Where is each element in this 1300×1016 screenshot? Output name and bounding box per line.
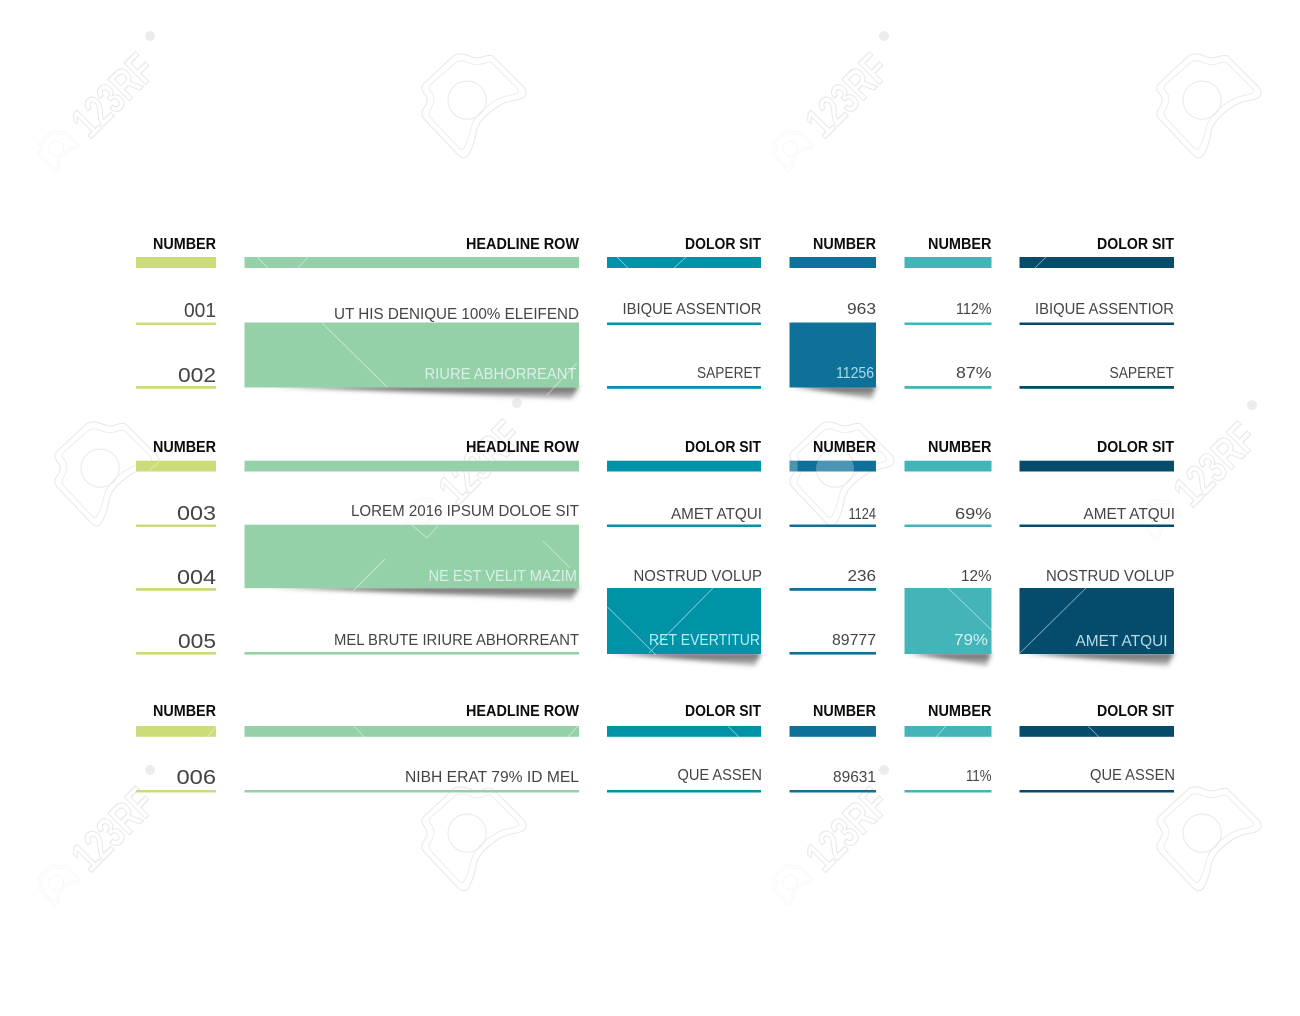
watermark: 123RF stamp middle left: 123RF — [429, 412, 532, 514]
highlight: teal note: RET EVERTITUR — [649, 632, 760, 649]
row 006: QUE ASSEN — [1090, 767, 1175, 784]
row 004: 004 — [177, 567, 216, 589]
watermark: 123RF stamp middle right — [1141, 400, 1267, 540]
header row 3: HEADLINE ROW — [466, 703, 579, 720]
row 006: NIBH ERAT 79% ID MEL — [405, 769, 579, 786]
header row 1: NUMBER — [813, 236, 876, 253]
row 004: NOSTRUD VOLUP — [634, 568, 762, 585]
header row 2: NUMBER — [928, 439, 992, 456]
watermark: 123RF stamp bottom left — [39, 765, 165, 905]
header row 3: NUMBER — [153, 703, 216, 720]
header row 2: NUMBER — [813, 439, 876, 456]
watermark: 123RF stamp middle right: 123RF — [1164, 414, 1267, 516]
header row 3: NUMBER — [928, 703, 992, 720]
row 006: 006 — [176, 767, 216, 789]
header row 2: HEADLINE ROW — [466, 439, 579, 456]
watermark: 123RF stamp middle left — [406, 398, 532, 538]
watermark: 123RF stamp top centre — [773, 31, 899, 171]
watermark: 123RF stamp top centre: 123RF — [796, 45, 899, 147]
header row 2: DOLOR SIT — [685, 439, 761, 456]
row 001 — [136, 300, 1174, 325]
watermark hairlines across coloured blocks — [149, 257, 1099, 737]
header row 1: DOLOR SIT — [685, 236, 761, 253]
table section 1 — [136, 236, 1174, 399]
row 001: IBIQUE ASSENTIOR — [1035, 301, 1174, 318]
row 002: 002 — [178, 365, 216, 387]
header row 3: NUMBER — [813, 703, 876, 720]
header row 2: NUMBER — [153, 439, 216, 456]
row 006: 11% — [966, 768, 992, 785]
row 002: SAPERET — [1110, 365, 1174, 382]
row 001: UT HIS DENIQUE 100% ELEIFEND — [334, 306, 579, 323]
table section 2 — [136, 439, 1175, 666]
highlight: teal note — [607, 588, 761, 666]
watermark highlight on number bar — [790, 460, 854, 472]
header row 1: NUMBER — [928, 236, 992, 253]
highlight: aqua note: 79% — [954, 632, 988, 649]
row 003: AMET ATQUI — [671, 506, 762, 523]
highlight: blue note: 11256 — [836, 365, 874, 382]
highlight: aqua note — [904, 588, 992, 666]
highlight: green note — [244, 525, 579, 600]
header row 3 — [136, 703, 1174, 737]
header row 1 — [136, 236, 1174, 268]
header row 1: DOLOR SIT — [1097, 236, 1174, 253]
header row 2: DOLOR SIT — [1097, 439, 1174, 456]
watermark: 123RF stamp top left: 123RF — [62, 45, 165, 147]
header row 1: NUMBER — [153, 236, 216, 253]
row 005: 005 — [178, 631, 216, 653]
row 003: 003 — [177, 503, 216, 525]
row 002 — [136, 322, 1174, 399]
row 002: SAPERET — [697, 365, 761, 382]
row 001: 001 — [184, 300, 216, 322]
watermark: 123RF stamp bottom centre — [773, 765, 899, 905]
row 005 — [136, 588, 1174, 666]
row 004: 12% — [961, 568, 992, 585]
watermark: egg logos — [55, 54, 1261, 891]
header row 3: DOLOR SIT — [1097, 703, 1174, 720]
table section 3 — [136, 703, 1175, 792]
watermark: 123RF stamp bottom left: 123RF — [62, 779, 165, 881]
highlight: blue note — [790, 322, 876, 399]
highlight: green note: NE EST VELIT MAZIM — [428, 568, 577, 585]
highlight: navy note: AMET ATQUI — [1076, 633, 1168, 650]
watermark: 123RF stamp top left — [39, 31, 165, 171]
highlight: green note — [244, 322, 579, 399]
row 004 — [136, 525, 1174, 600]
row 003: AMET ATQUI — [1084, 506, 1175, 523]
row 003: 69% — [955, 506, 992, 523]
row 004: NOSTRUD VOLUP — [1046, 568, 1174, 585]
row 001: 963 — [847, 301, 876, 318]
header row 2 — [136, 439, 1174, 472]
row 003 — [136, 503, 1175, 527]
watermark: 123RF stamp bottom centre: 123RF — [796, 779, 899, 881]
row 003: 1124 — [848, 506, 876, 523]
row 001: IBIQUE ASSENTIOR — [622, 301, 762, 318]
row 001: 112% — [956, 301, 992, 318]
highlight: navy note — [1020, 588, 1174, 666]
row 005: MEL BRUTE IRIURE ABHORREANT — [334, 632, 580, 649]
row 004: 236 — [848, 568, 876, 585]
row 006: 89631 — [833, 769, 876, 786]
highlight: green note: RIURE ABHORREANT — [424, 366, 577, 383]
row 003: LOREM 2016 IPSUM DOLOE SIT — [351, 503, 580, 520]
row 005: 89777 — [832, 632, 876, 649]
header row 3: DOLOR SIT — [685, 703, 761, 720]
row 006 — [136, 767, 1175, 792]
row 006: QUE ASSEN — [678, 767, 762, 784]
row 002: 87% — [956, 365, 992, 382]
header row 1: HEADLINE ROW — [466, 236, 579, 253]
